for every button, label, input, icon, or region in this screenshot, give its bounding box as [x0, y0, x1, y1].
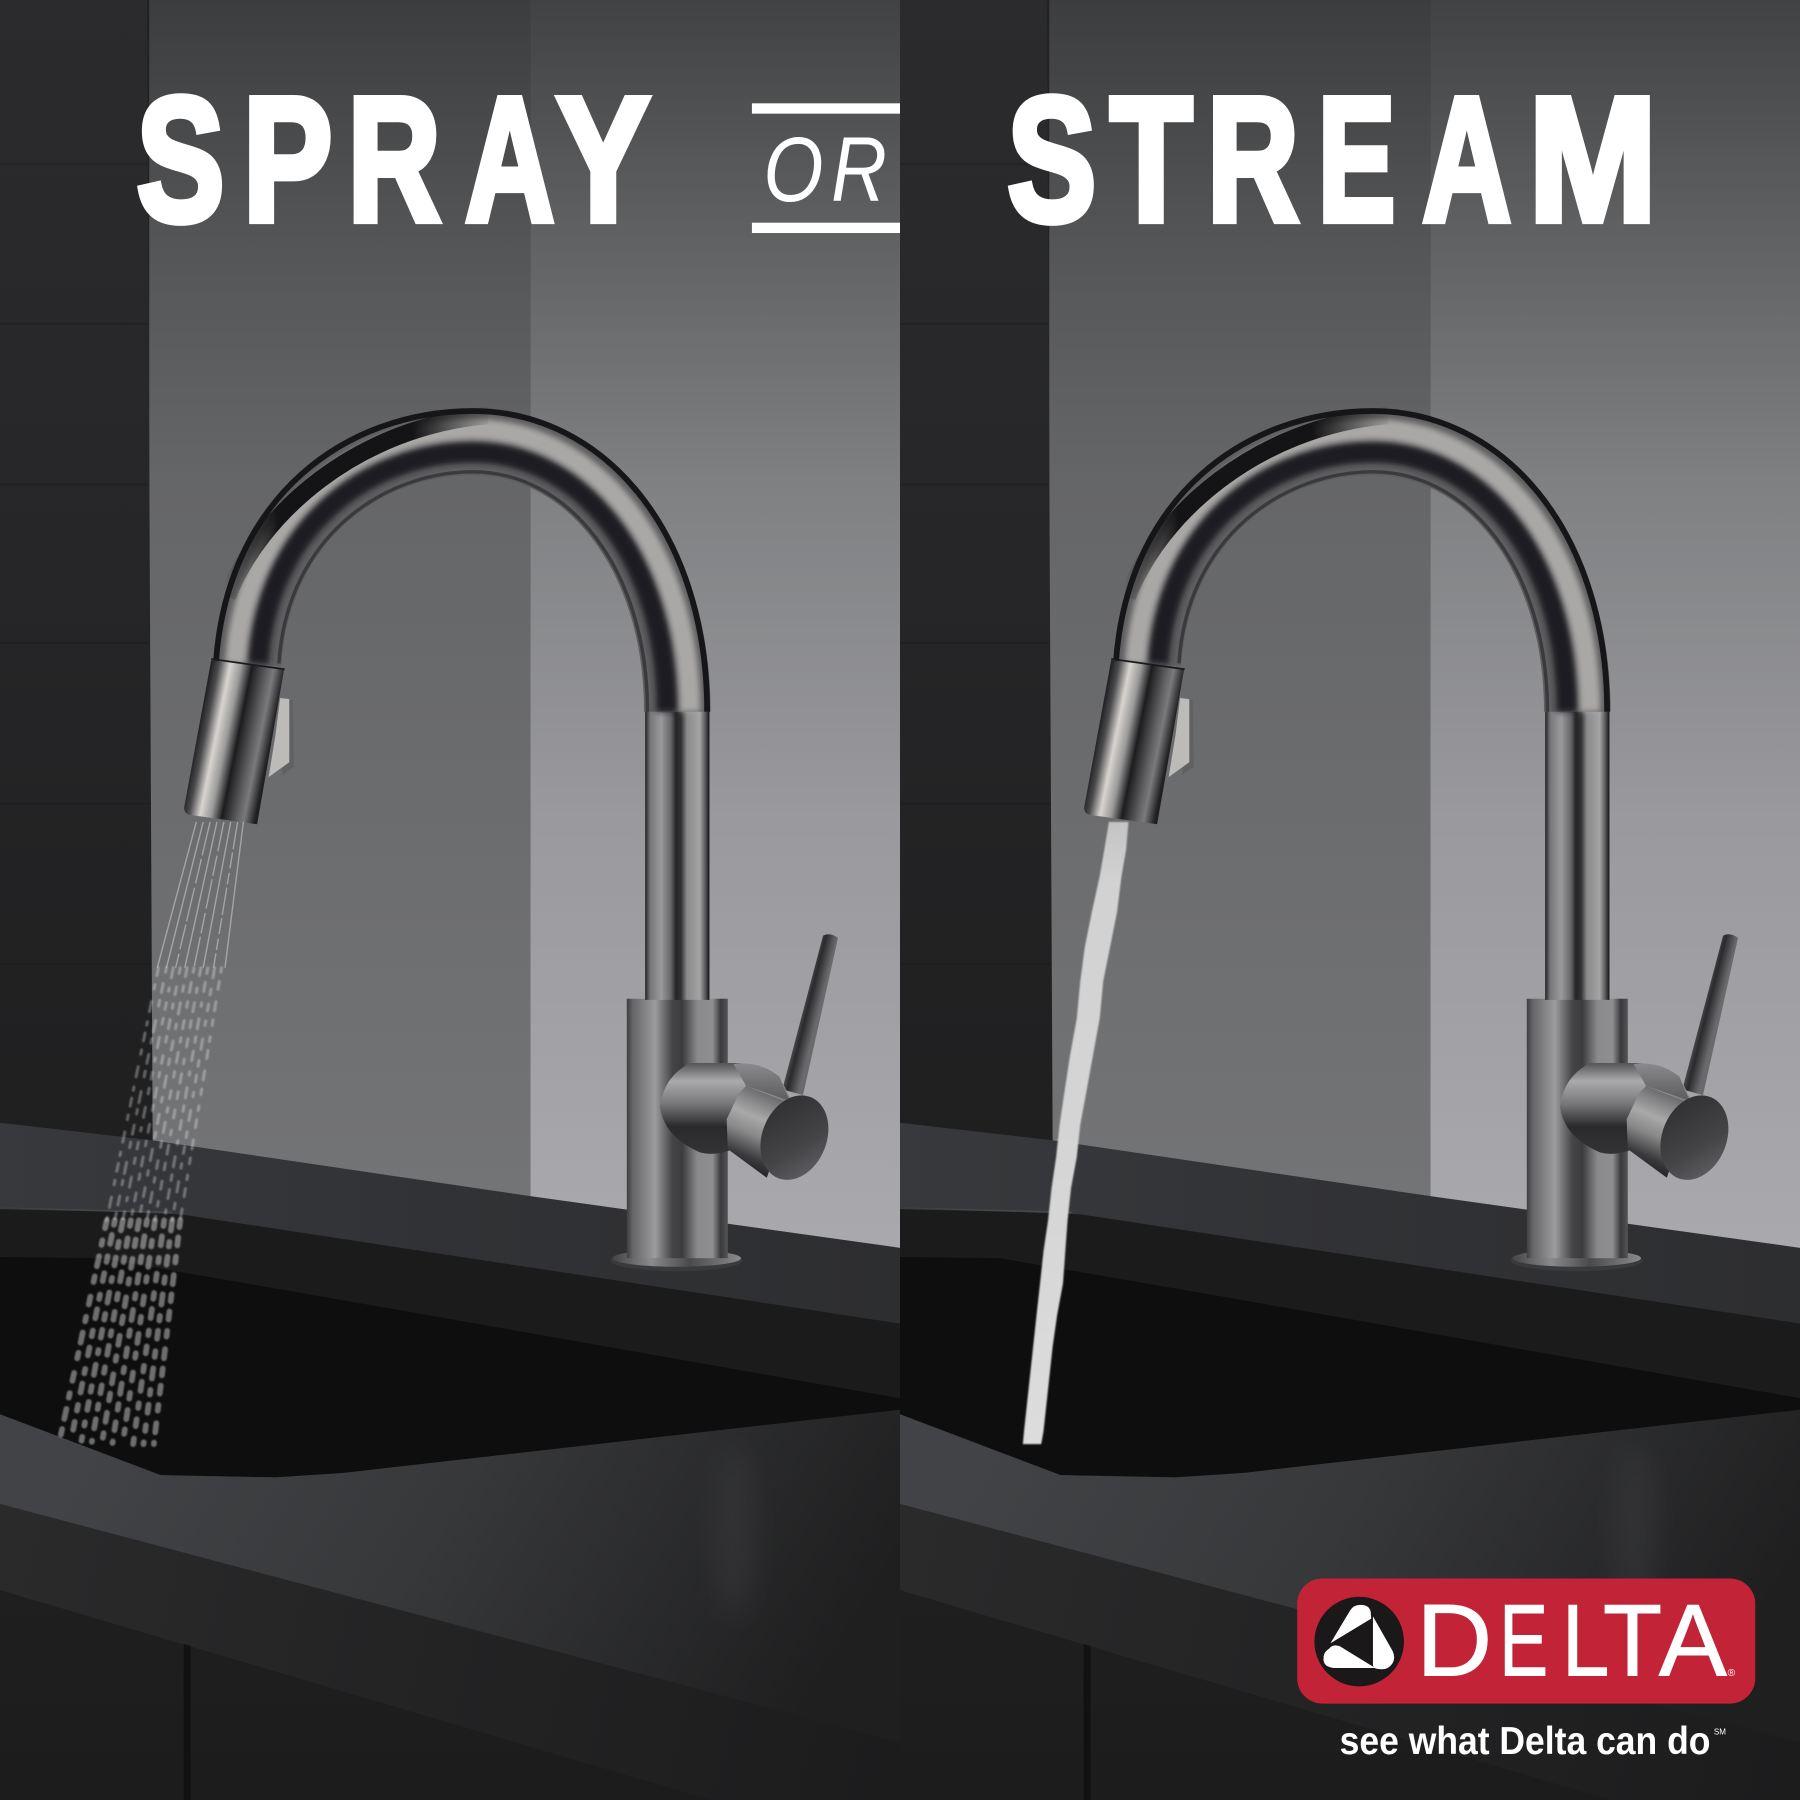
heading: SPRAY: P [243, 61, 332, 259]
faucet [184, 411, 841, 1271]
logo: Delta: T [1603, 1584, 1662, 1698]
logo: Delta [1297, 1578, 1755, 1704]
heading: STREAM: R [1207, 61, 1299, 258]
logo: Delta: ® [1728, 1668, 1736, 1679]
water spray [61, 822, 243, 1444]
panel: spray (left) [0, 0, 900, 1800]
OR divider [752, 103, 900, 233]
heading: STREAM: T [1110, 62, 1192, 259]
heading: SPRAY: A [465, 61, 554, 259]
lever handle [782, 934, 838, 1095]
sprayer head [184, 660, 284, 824]
heading: STREAM: S [1007, 61, 1096, 259]
sprayer button [269, 698, 294, 777]
heading: STREAM [1007, 61, 1657, 259]
logo: Delta: L [1562, 1583, 1610, 1697]
faucet (right) [1084, 411, 1741, 1271]
OR divider: O [763, 118, 823, 220]
kitchen background (right) [900, 0, 1800, 1800]
heading: STREAM: E [1318, 61, 1395, 258]
heading: SPRAY: R [348, 60, 441, 258]
panel: stream (right) [900, 0, 1800, 1800]
tagline: SM [1714, 1728, 1726, 1737]
heading: SPRAY: S [137, 62, 224, 259]
icon: Delta triangle mark [1314, 1597, 1404, 1686]
tagline: see what Delta can do [1340, 1720, 1710, 1763]
water stream [1023, 822, 1128, 1444]
knob [660, 1063, 841, 1190]
kitchen background: wall, counter and sink [0, 0, 900, 1800]
OR divider: R [831, 118, 887, 220]
logo: Delta: E [1499, 1582, 1548, 1697]
sprayer collar line [211, 659, 285, 669]
deck ring [611, 1250, 743, 1271]
heading: SPRAY [137, 60, 650, 259]
logo: Delta: A [1659, 1583, 1727, 1697]
logo: Delta: D [1416, 1583, 1492, 1697]
heading: SPRAY: Y [557, 61, 650, 258]
arched spout [216, 411, 707, 712]
base column [627, 999, 728, 1258]
heading: STREAM: M [1529, 62, 1657, 259]
heading: STREAM: A [1423, 61, 1511, 259]
vertical spout [645, 698, 709, 1000]
